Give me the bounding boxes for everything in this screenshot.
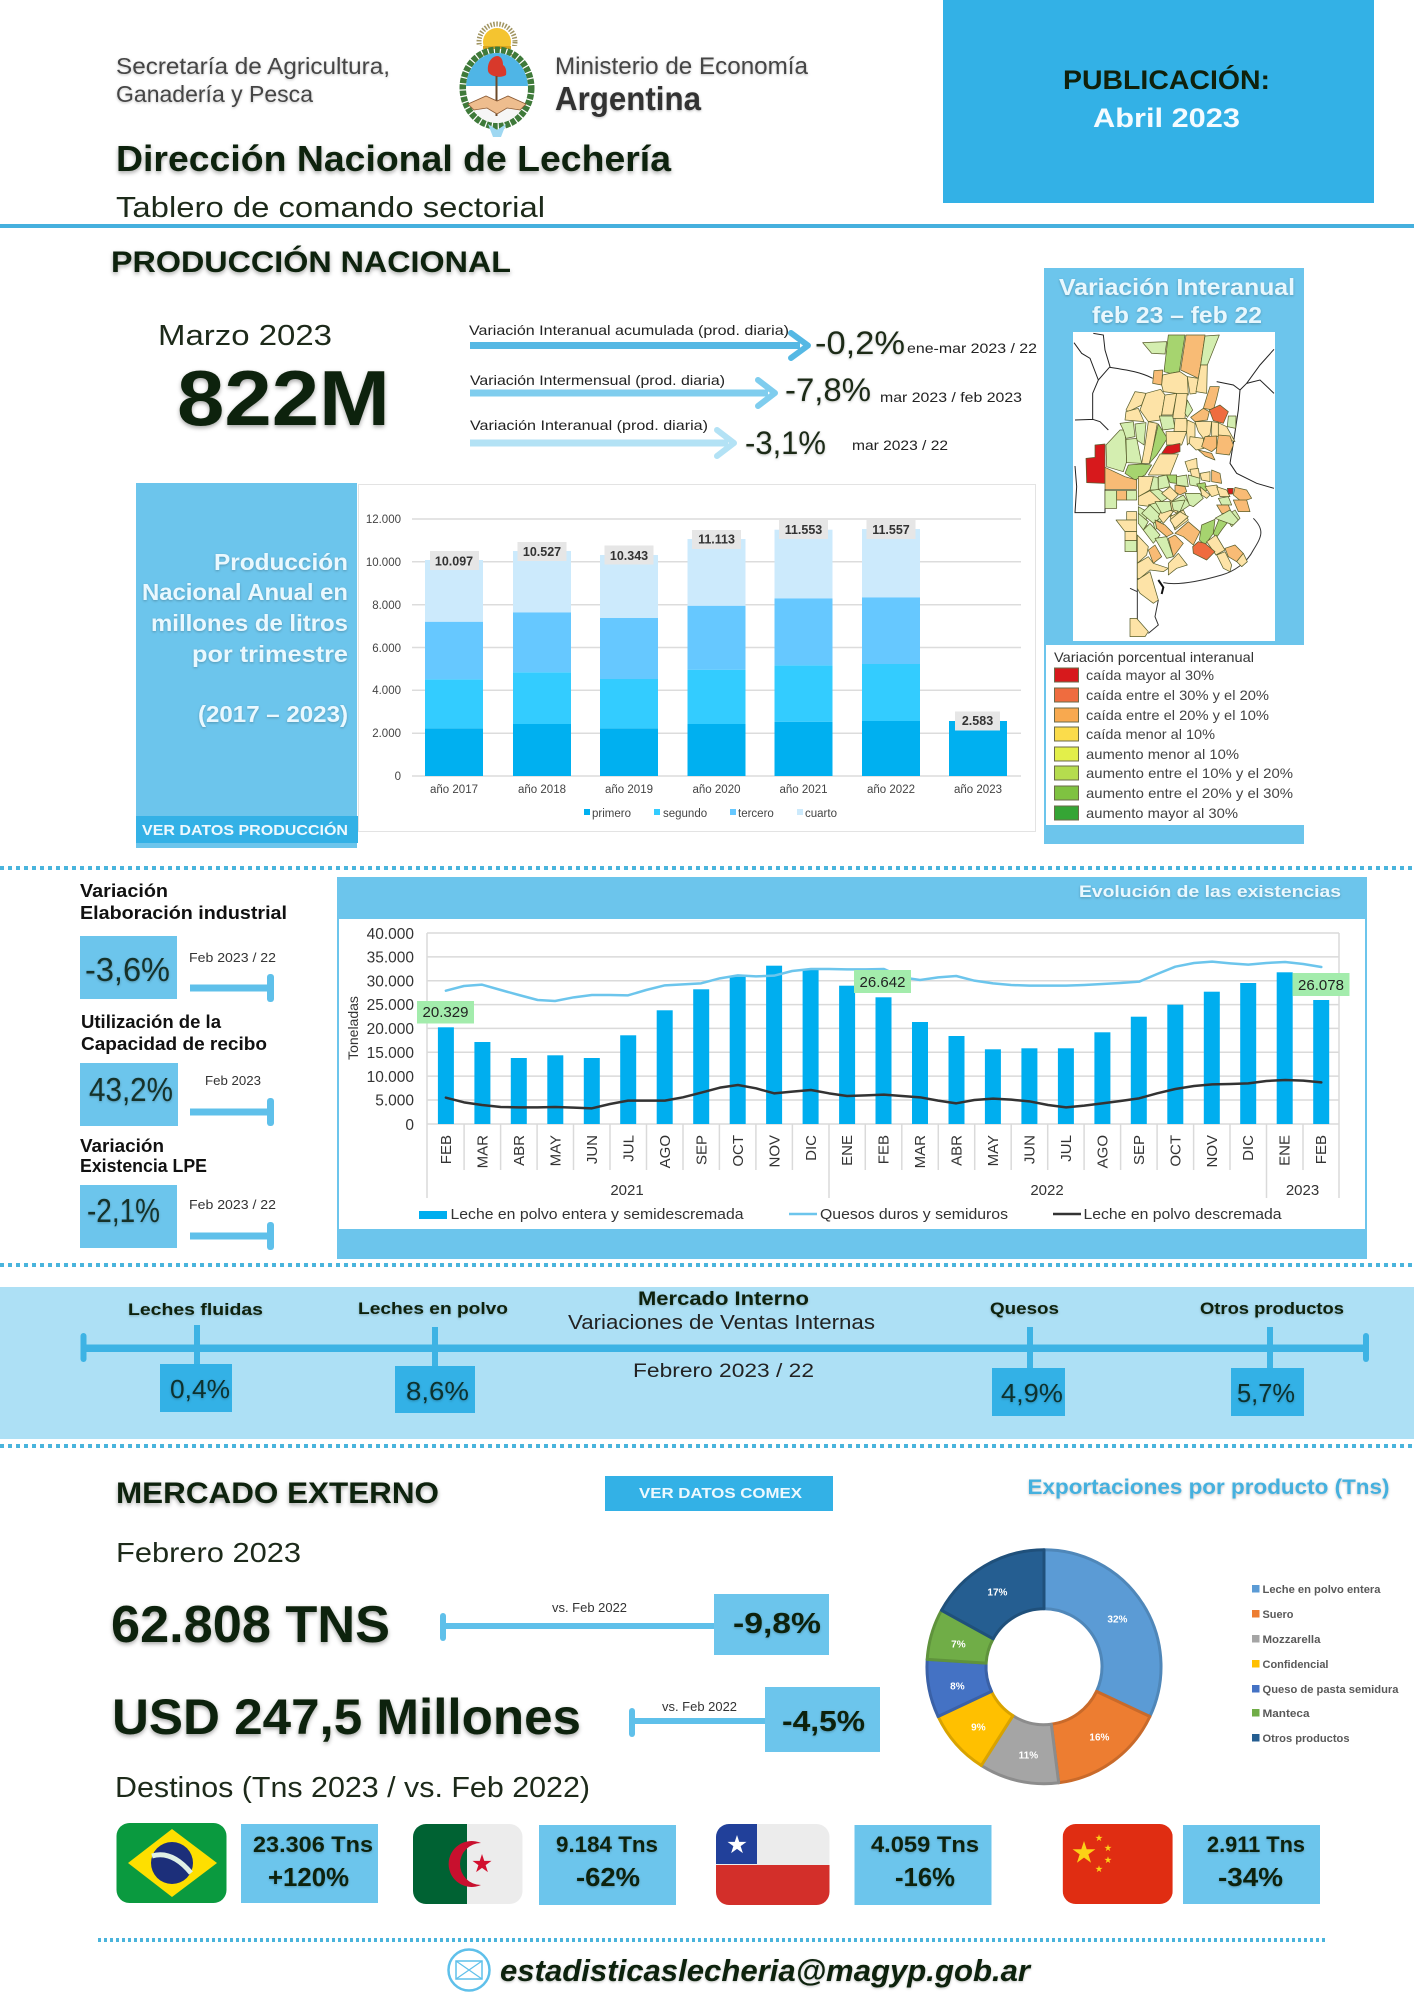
title: Dirección Nacional de Lechería bbox=[116, 138, 672, 179]
donut chart: 17% bbox=[987, 1588, 1008, 1598]
panel: publication date: PUBLICACIÓN: bbox=[1063, 64, 1270, 95]
metric: toneladas: vs. Feb 2022 bbox=[552, 1601, 627, 1615]
variation arrow 2 bbox=[470, 372, 1022, 408]
category: quesos: 4,9% bbox=[1001, 1378, 1063, 1408]
category: leches fluidas: 0,4% bbox=[170, 1374, 230, 1404]
map title: feb 23 – feb 22 bbox=[1092, 302, 1262, 328]
chart legend: primero bbox=[592, 808, 631, 820]
category: leches en polvo: 8,6% bbox=[406, 1376, 469, 1406]
donut chart: 8% bbox=[950, 1682, 965, 1692]
indicator: existencia LPE: Existencia LPE bbox=[80, 1156, 207, 1176]
map legend: aumento entre el 10% y el 20% bbox=[1086, 765, 1293, 781]
combo chart: existencias: 20.000 bbox=[367, 1021, 414, 1038]
combo chart: existencias: MAY bbox=[548, 1135, 564, 1166]
variation arrow 3 bbox=[470, 417, 948, 461]
combo chart: existencias: JUN bbox=[1022, 1135, 1038, 1164]
bar chart: producción anual: 4.000 bbox=[372, 685, 401, 697]
bar chart: producción anual: 12.000 bbox=[366, 514, 401, 526]
heading: Variaciones de Ventas Internas bbox=[568, 1312, 875, 1334]
panel text bbox=[142, 549, 348, 727]
donut chart: 7% bbox=[951, 1640, 966, 1650]
combo chart: existencias: JUN bbox=[584, 1135, 601, 1164]
destination: Chile: 4.059 Tns bbox=[871, 1832, 979, 1857]
combo chart: existencias: 0 bbox=[405, 1117, 414, 1134]
donut legend: Confidencial bbox=[1262, 1659, 1328, 1671]
chart legend bbox=[419, 1206, 1282, 1223]
combo chart: existencias: MAR bbox=[474, 1135, 492, 1168]
combo chart: existencias: SEP bbox=[694, 1135, 710, 1165]
email: estadisticaslecheria@magyp.gob.ar bbox=[500, 1953, 1032, 1988]
bar chart: producción anual: año 2018 bbox=[518, 784, 566, 796]
metric: toneladas: 62.808 TNS bbox=[111, 1596, 390, 1654]
combo chart: existencias: DIC bbox=[1240, 1135, 1257, 1161]
destination: China: -34% bbox=[1218, 1862, 1283, 1892]
combo chart: existencias: ABR bbox=[948, 1135, 966, 1166]
icon: flag of Algeria bbox=[413, 1824, 523, 1904]
variation arrow 2: -7,8% bbox=[785, 372, 871, 408]
panel text: Nacional Anual en bbox=[142, 579, 348, 605]
destination: Argelia: -62% bbox=[576, 1862, 640, 1892]
footer: contact bbox=[448, 1950, 1032, 1990]
destination: Brasil bbox=[241, 1824, 378, 1903]
indicator: capacidad de recibo bbox=[80, 1012, 274, 1126]
bar chart: producción anual: 8.000 bbox=[372, 600, 401, 612]
variation arrow 3: -3,1% bbox=[745, 425, 826, 461]
map legend: aumento menor al 10% bbox=[1086, 746, 1239, 762]
combo chart: existencias: 30.000 bbox=[367, 974, 414, 990]
panel text: (2017 – 2023) bbox=[198, 701, 348, 727]
bar chart: producción anual: 2.583 bbox=[962, 714, 993, 728]
donut legend: Queso de pasta semidura bbox=[1262, 1684, 1399, 1696]
combo chart: existencias: Toneladas bbox=[345, 996, 361, 1060]
big number: 822M bbox=[177, 354, 390, 442]
chart legend: segundo bbox=[663, 808, 707, 820]
bar chart: producción anual bbox=[358, 484, 1036, 832]
category: quesos: Quesos bbox=[990, 1299, 1059, 1318]
heading bbox=[568, 1289, 875, 1382]
combo chart: existencias: AGO bbox=[1094, 1135, 1112, 1168]
donut chart bbox=[927, 1550, 1161, 1784]
bar chart: producción anual: 10.097 bbox=[435, 554, 473, 568]
destination: Chile: -16% bbox=[895, 1862, 955, 1892]
panel: publication date bbox=[943, 0, 1374, 203]
logo text: Secretaría bbox=[116, 53, 390, 107]
logo text: Ministerio bbox=[555, 53, 809, 117]
combo chart: existencias: FEB bbox=[438, 1135, 455, 1164]
donut legend bbox=[1252, 1584, 1399, 1745]
button: ver datos comex bbox=[605, 1476, 833, 1511]
data label: 20.329 bbox=[417, 1001, 474, 1024]
combo chart: existencias: MAR bbox=[912, 1135, 929, 1168]
combo chart: existencias: DIC bbox=[803, 1135, 820, 1161]
map legend: caída mayor al 30% bbox=[1086, 667, 1214, 683]
data label: 20.329: 20.329 bbox=[423, 1004, 468, 1021]
category: otros productos bbox=[1200, 1299, 1344, 1416]
panel: map variación interanual bbox=[1044, 268, 1304, 844]
indicator: elaboración industrial: Elaboración industrial bbox=[80, 903, 287, 923]
map legend: Variación porcentual interanual bbox=[1054, 649, 1254, 665]
category: quesos bbox=[990, 1299, 1065, 1416]
metric: toneladas: -9,8% bbox=[733, 1608, 821, 1640]
heading: Febrero 2023 / 22 bbox=[633, 1361, 814, 1382]
logo text: Secretaría: Ganadería y Pesca bbox=[116, 81, 313, 107]
icon: flag of Chile bbox=[716, 1824, 830, 1906]
chart legend bbox=[584, 808, 837, 820]
indicator: capacidad de recibo: 43,2% bbox=[89, 1071, 173, 1108]
panel: publication date: Abril 2023 bbox=[1093, 103, 1240, 133]
indicator: elaboración industrial bbox=[80, 881, 287, 1002]
logo text: Ministerio: Ministerio de Economía bbox=[555, 53, 809, 80]
combo chart: existencias: FEB bbox=[1313, 1135, 1330, 1164]
bar chart: producción anual: 2.000 bbox=[372, 728, 401, 740]
bar chart: producción anual: 6.000 bbox=[372, 643, 401, 655]
data label: 26.078 bbox=[1292, 973, 1350, 996]
combo chart: existencias: AGO bbox=[657, 1135, 674, 1168]
indicator: capacidad de recibo: Utilización de la bbox=[81, 1012, 222, 1032]
bar chart: producción anual: 11.557 bbox=[872, 523, 910, 537]
combo chart: existencias: OCT bbox=[1168, 1135, 1184, 1167]
bar chart: producción anual: año 2017 bbox=[430, 784, 478, 796]
variation arrow 3: Variación Interanual (prod. diaria) bbox=[470, 417, 708, 433]
map legend: caída entre el 20% y el 10% bbox=[1086, 707, 1269, 723]
chart legend: Quesos duros y semiduros bbox=[820, 1206, 1008, 1223]
donut legend: Otros productos bbox=[1262, 1733, 1350, 1745]
combo chart: existencias: 35.000 bbox=[367, 950, 414, 966]
panel: header bbox=[116, 0, 1374, 224]
bar chart: producción anual: año 2023 bbox=[954, 784, 1002, 796]
donut chart: 9% bbox=[971, 1722, 986, 1734]
panel text: Producción bbox=[214, 549, 348, 575]
heading: Mercado Interno bbox=[638, 1289, 809, 1310]
combo chart: existencias: NOV bbox=[1204, 1135, 1221, 1168]
bar chart: producción anual: 0 bbox=[395, 771, 401, 783]
category: leches fluidas: Leches fluidas bbox=[128, 1300, 263, 1319]
indicator: capacidad de recibo: Capacidad de recibo bbox=[81, 1034, 267, 1054]
bar chart: producción anual: año 2019 bbox=[605, 784, 653, 796]
combo chart: existencias: 40.000 bbox=[367, 926, 414, 943]
heading: PRODUCCIÓN NACIONAL bbox=[111, 245, 511, 279]
panel: producción nacional headline bbox=[111, 245, 1037, 461]
combo chart: existencias: ENE bbox=[1276, 1135, 1294, 1166]
timeline bbox=[80, 1325, 1369, 1369]
bar chart: producción anual: 10.343 bbox=[610, 549, 648, 563]
panel heading: Evolución de las existencias bbox=[1079, 882, 1341, 901]
month label: Marzo 2023 bbox=[158, 320, 332, 352]
bar chart: producción anual: 10.000 bbox=[366, 557, 401, 569]
button: ver datos producción: VER DATOS PRODUCCIÓN bbox=[142, 821, 348, 839]
category: leches en polvo bbox=[358, 1299, 508, 1413]
donut legend: Manteca bbox=[1262, 1708, 1310, 1720]
destination: Chile bbox=[854, 1825, 992, 1905]
subtitle: Tablero de comando sectorial bbox=[116, 192, 545, 224]
combo chart: existencias: NOV bbox=[766, 1135, 784, 1168]
metric: dólares: USD 247,5 Millones bbox=[112, 1689, 581, 1745]
variation arrow 3: mar 2023 / 22 bbox=[852, 437, 948, 453]
donut legend: Mozzarella bbox=[1262, 1634, 1321, 1646]
destination: Brasil: 23.306 Tns bbox=[253, 1832, 373, 1857]
combo chart: existencias: 25.000 bbox=[367, 997, 414, 1014]
panel: exportaciones por producto bbox=[927, 1476, 1399, 1784]
indicator: existencia LPE: -2,1% bbox=[87, 1192, 160, 1229]
bar chart: producción anual: año 2020 bbox=[693, 784, 740, 796]
combo chart: existencias: 2023 bbox=[1286, 1182, 1319, 1199]
combo chart: existencias: 2022 bbox=[1030, 1182, 1064, 1199]
bar chart: producción anual: año 2022 bbox=[867, 784, 915, 796]
indicator: existencia LPE: Variación bbox=[80, 1136, 164, 1156]
bar chart: producción anual: 11.553 bbox=[785, 523, 822, 537]
indicator: elaboración industrial: -3,6% bbox=[85, 951, 170, 988]
indicator: capacidad de recibo: Feb 2023 bbox=[205, 1074, 261, 1088]
heading: MERCADO EXTERNO bbox=[116, 1477, 439, 1510]
panel: mercado interno bbox=[0, 1287, 1414, 1439]
destination: Argelia bbox=[539, 1825, 676, 1905]
chart legend: tercero bbox=[738, 808, 774, 820]
variation arrow 1 bbox=[469, 322, 1037, 361]
map legend: aumento entre el 20% y el 30% bbox=[1086, 785, 1293, 801]
combo chart: existencias: 5.000 bbox=[375, 1092, 414, 1110]
map title bbox=[1059, 274, 1295, 328]
bar chart: producción anual: año 2021 bbox=[780, 784, 827, 796]
destination: Argelia: 9.184 Tns bbox=[556, 1832, 658, 1857]
metric: toneladas bbox=[111, 1594, 829, 1655]
metric: dólares: vs. Feb 2022 bbox=[662, 1700, 737, 1714]
icon: flag of Brazil bbox=[116, 1823, 226, 1903]
destination: China bbox=[1183, 1825, 1320, 1904]
donut chart: 11% bbox=[1019, 1750, 1038, 1762]
destination: China: 2.911 Tns bbox=[1207, 1832, 1305, 1857]
map legend: caída menor al 10% bbox=[1086, 726, 1215, 742]
metric: dólares: -4,5% bbox=[782, 1706, 865, 1738]
indicator: elaboración industrial: Feb 2023 / 22 bbox=[189, 951, 276, 965]
variation arrow 1: ene-mar 2023 / 22 bbox=[907, 340, 1037, 356]
map legend: aumento mayor al 30% bbox=[1086, 805, 1238, 821]
donut chart: 32% bbox=[1107, 1614, 1128, 1626]
indicator: existencia LPE: Feb 2023 / 22 bbox=[189, 1198, 276, 1212]
combo chart: existencias: MAY bbox=[985, 1135, 1002, 1166]
panel text: millones de litros bbox=[151, 610, 348, 636]
combo chart: existencias: JUL bbox=[1058, 1135, 1075, 1162]
panel: destinations bbox=[116, 1823, 1320, 1906]
combo chart: existencias: 10.000 bbox=[367, 1069, 414, 1086]
chart legend: cuarto bbox=[805, 808, 837, 820]
variation arrow 1: -0,2% bbox=[815, 325, 905, 361]
combo chart: existencias: SEP bbox=[1131, 1135, 1148, 1165]
logo text: Secretaría: Secretaría de Agricultura, bbox=[116, 53, 390, 79]
category: leches en polvo: Leches en polvo bbox=[358, 1299, 508, 1318]
bar chart: producción anual: 11.113 bbox=[698, 532, 735, 546]
chart legend: Leche en polvo descremada bbox=[1084, 1206, 1282, 1223]
icon: national coat of arms bbox=[463, 24, 531, 137]
map legend: caída entre el 30% y el 20% bbox=[1086, 687, 1269, 703]
donut legend: Suero bbox=[1262, 1609, 1294, 1621]
indicator: existencia LPE bbox=[80, 1136, 276, 1250]
data label: 26.078: 26.078 bbox=[1298, 977, 1344, 994]
chart legend: Leche en polvo entera y semidescremada bbox=[450, 1206, 744, 1223]
data label: 26.642: 26.642 bbox=[860, 974, 905, 991]
category: otros productos: 5,7% bbox=[1237, 1378, 1295, 1408]
combo chart: existencias bbox=[345, 926, 1350, 1223]
destinations heading: Destinos (Tns 2023 / vs. Feb 2022) bbox=[115, 1772, 590, 1804]
variation arrow 1: Variación Interanual acumulada (prod. diaria) bbox=[469, 322, 789, 338]
button: ver datos comex: VER DATOS COMEX bbox=[639, 1485, 802, 1502]
indicator: elaboración industrial: Variación bbox=[80, 881, 168, 901]
metric: dólares bbox=[112, 1687, 880, 1752]
combo chart: existencias: ENE bbox=[839, 1135, 856, 1166]
panel text: por trimestre bbox=[192, 641, 348, 667]
bar chart: producción anual: 10.527 bbox=[523, 545, 561, 559]
panel: evolución de las existencias bbox=[337, 877, 1367, 1259]
button: ver datos producción bbox=[136, 816, 358, 843]
variation arrow 2: mar 2023 / feb 2023 bbox=[880, 389, 1022, 405]
donut chart: 16% bbox=[1089, 1732, 1110, 1744]
period: Febrero 2023 bbox=[116, 1537, 301, 1568]
combo chart: existencias: OCT bbox=[730, 1135, 747, 1167]
data label: 26.642 bbox=[854, 970, 911, 993]
category: otros productos: Otros productos bbox=[1200, 1299, 1344, 1318]
panel: mercado externo bbox=[111, 1476, 880, 1804]
donut legend: Leche en polvo entera bbox=[1262, 1584, 1381, 1596]
combo chart: existencias: ABR bbox=[511, 1135, 528, 1166]
destination: Brasil: +120% bbox=[268, 1862, 349, 1892]
chart heading: Exportaciones por producto (Tns) bbox=[1028, 1476, 1390, 1499]
map legend bbox=[1046, 645, 1304, 825]
combo chart: existencias: FEB bbox=[876, 1135, 892, 1164]
combo chart: existencias: 15.000 bbox=[367, 1045, 414, 1062]
combo chart: existencias: 2021 bbox=[610, 1182, 644, 1199]
category: leches fluidas bbox=[128, 1300, 263, 1412]
icon: envelope bbox=[448, 1950, 490, 1990]
panel: indicadores industriales bbox=[80, 881, 287, 1250]
variation arrow 2: Variación Intermensual (prod. diaria) bbox=[470, 372, 725, 388]
logo text: Ministerio: Argentina bbox=[555, 80, 702, 117]
panel: producción anual label bbox=[136, 483, 358, 848]
icon: flag of China bbox=[1063, 1824, 1173, 1904]
combo chart: existencias: JUL bbox=[620, 1135, 638, 1162]
map title: Variación Interanual bbox=[1059, 274, 1295, 300]
map bbox=[1073, 332, 1275, 641]
